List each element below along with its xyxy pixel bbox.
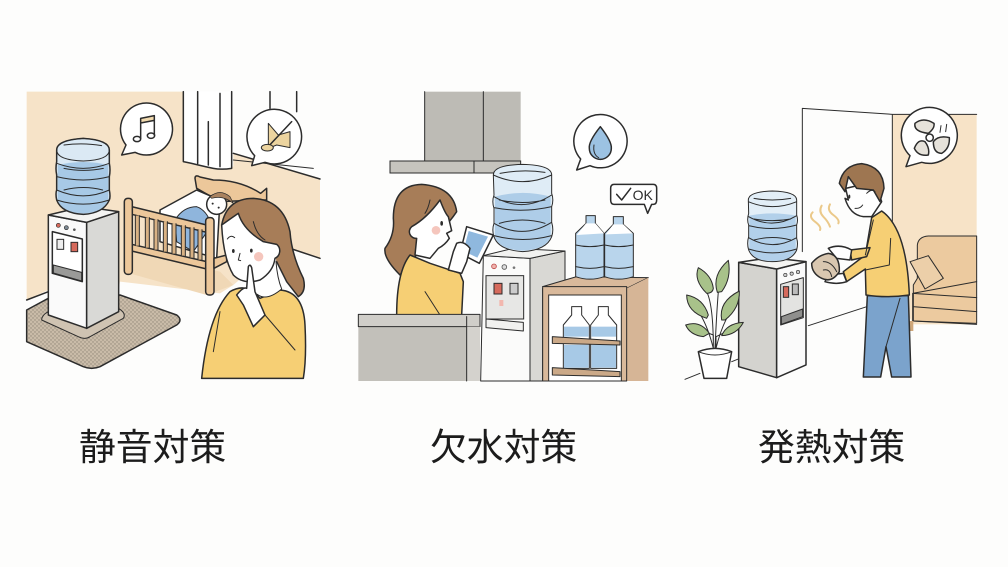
- wall background: [27, 92, 320, 300]
- server cabinet: [48, 215, 87, 328]
- speech bubble: water drop: [574, 114, 627, 170]
- top bottles: [576, 216, 633, 279]
- woman with finger to lips: [202, 198, 306, 378]
- window and curtain: [183, 92, 320, 179]
- floor line: [685, 358, 740, 379]
- water bottle: [493, 164, 553, 252]
- water server: [739, 191, 806, 378]
- door panel: [802, 108, 977, 326]
- water bottle: [56, 138, 110, 214]
- OK check callout: [611, 184, 657, 213]
- floor mat: [27, 295, 180, 368]
- water server: [481, 164, 565, 381]
- head: [845, 182, 882, 217]
- label: water shortage control: 欠水対策: [430, 427, 577, 468]
- panel: heat control illustration: [685, 107, 977, 379]
- range hood: [390, 92, 521, 173]
- water server: [48, 138, 119, 328]
- sweater: [843, 211, 909, 297]
- heat waves: [811, 204, 839, 230]
- panel: water shortage illustration: [358, 92, 657, 381]
- back wall: [892, 114, 977, 324]
- trousers: [863, 296, 911, 377]
- crib shadow on floor: [123, 252, 233, 295]
- man cleaning: [812, 164, 911, 377]
- baby crib: [124, 176, 267, 295]
- OK check callout: OK: [633, 187, 654, 203]
- water bottle: [748, 191, 797, 262]
- label: noise control: 静音対策: [79, 427, 226, 468]
- floor line: [27, 245, 320, 300]
- panel: noise control illustration: [27, 92, 320, 378]
- speech bubble: music note: [121, 103, 173, 155]
- stored bottles: [563, 307, 617, 368]
- potted plant: [686, 260, 743, 378]
- kitchen counter: [358, 314, 480, 381]
- speech bubble: fan: [901, 107, 957, 167]
- hands and cloth: [825, 246, 852, 283]
- label: heat control: 発熱対策: [758, 427, 905, 468]
- wooden shelf with bottles: [543, 216, 648, 381]
- tablet: [460, 227, 493, 263]
- speech bubble: muted speaker: [247, 109, 302, 166]
- baby: [175, 192, 233, 252]
- sofa: [908, 236, 977, 331]
- woman with tablet: [385, 184, 493, 315]
